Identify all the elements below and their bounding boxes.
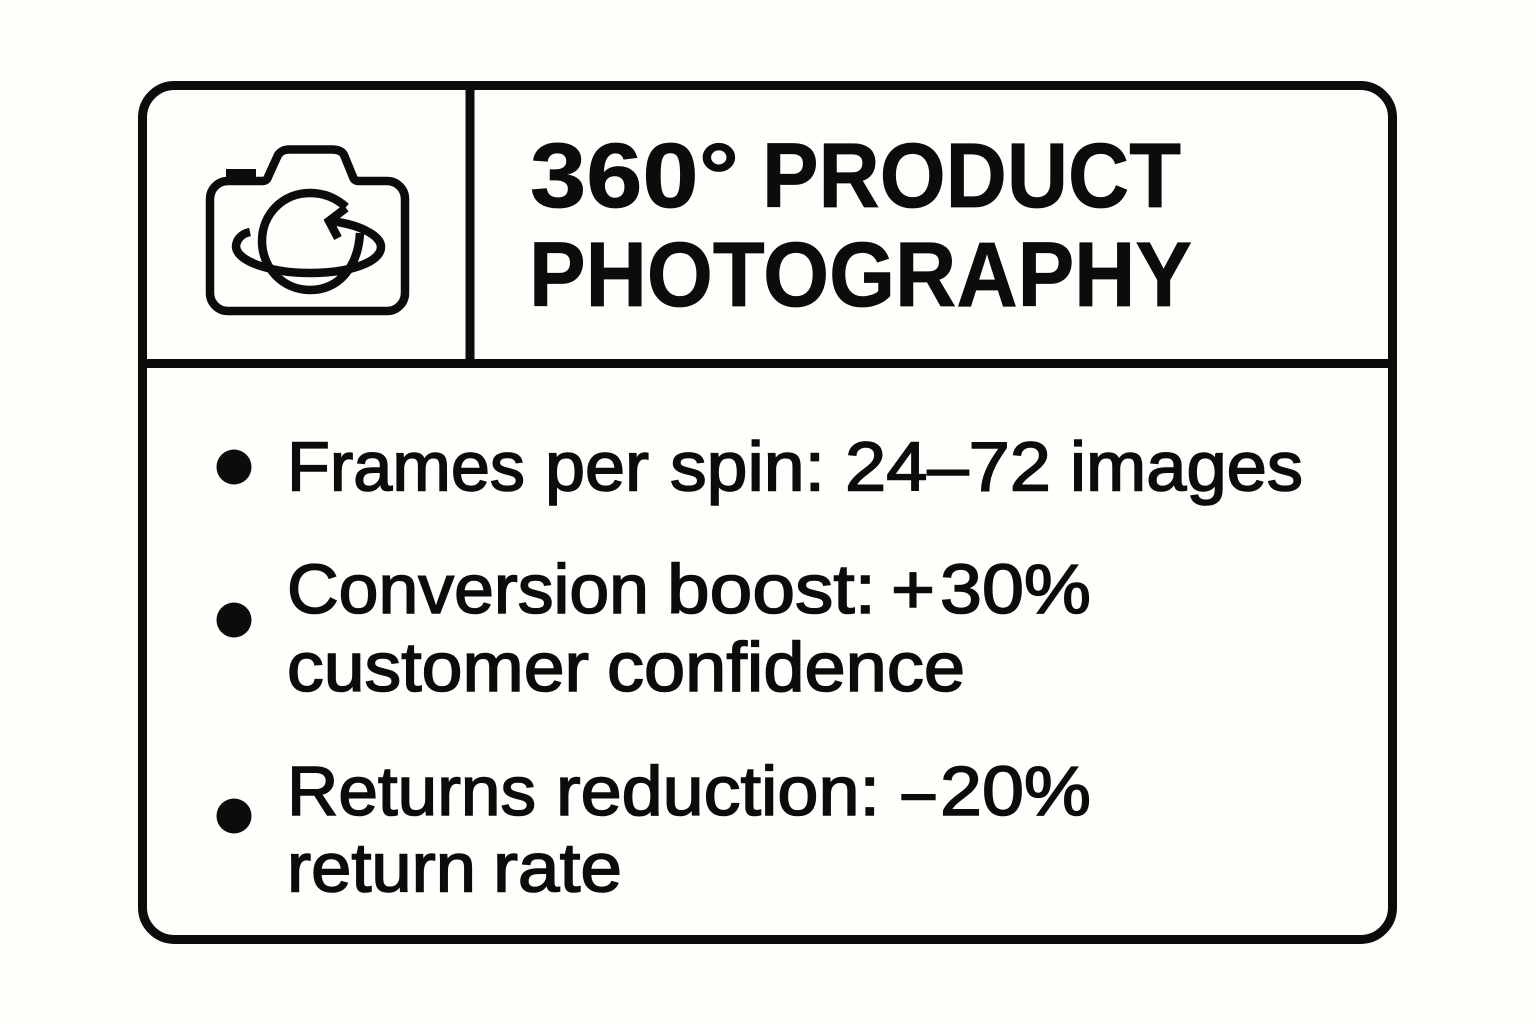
- bullet: returns reduction: reduction:: [556, 752, 880, 830]
- bullet: conversion boost: 30%: [940, 550, 1091, 628]
- bullet: frames per spin: images: [1070, 428, 1303, 506]
- title: PRODUCT: [762, 125, 1181, 227]
- bullet: conversion boost: +: [891, 550, 935, 628]
- bullet: returns reduction: –: [902, 752, 935, 830]
- bullet: returns reduction: Returns: [287, 752, 536, 830]
- bullet: conversion boost: [216, 550, 1091, 706]
- bullet: frames per spin: per: [545, 428, 649, 506]
- title: 360°: [530, 125, 739, 227]
- bullet: frames per spin: 24–72: [845, 428, 1051, 506]
- bullet: returns reduction: 20%: [940, 752, 1091, 830]
- bullet: conversion boost: boost:: [667, 550, 876, 628]
- bullet: frames per spin: [216, 428, 1303, 506]
- icon: camera with 360 rotation: [210, 150, 405, 311]
- bullet: returns reduction: [216, 752, 1091, 906]
- bullet: conversion boost: confidence: [607, 628, 965, 706]
- bullet: returns reduction: return: [287, 828, 476, 906]
- bullet: conversion boost: Conversion: [287, 550, 649, 628]
- bullet: frames per spin: Frames: [287, 428, 525, 506]
- title: PHOTOGRAPHY: [529, 224, 1192, 326]
- bullet: returns reduction: rate: [493, 828, 622, 906]
- card panel: [142, 86, 1392, 940]
- title: [529, 125, 1192, 326]
- bullet: frames per spin: spin:: [670, 428, 825, 506]
- bullet: conversion boost: customer: [287, 628, 589, 706]
